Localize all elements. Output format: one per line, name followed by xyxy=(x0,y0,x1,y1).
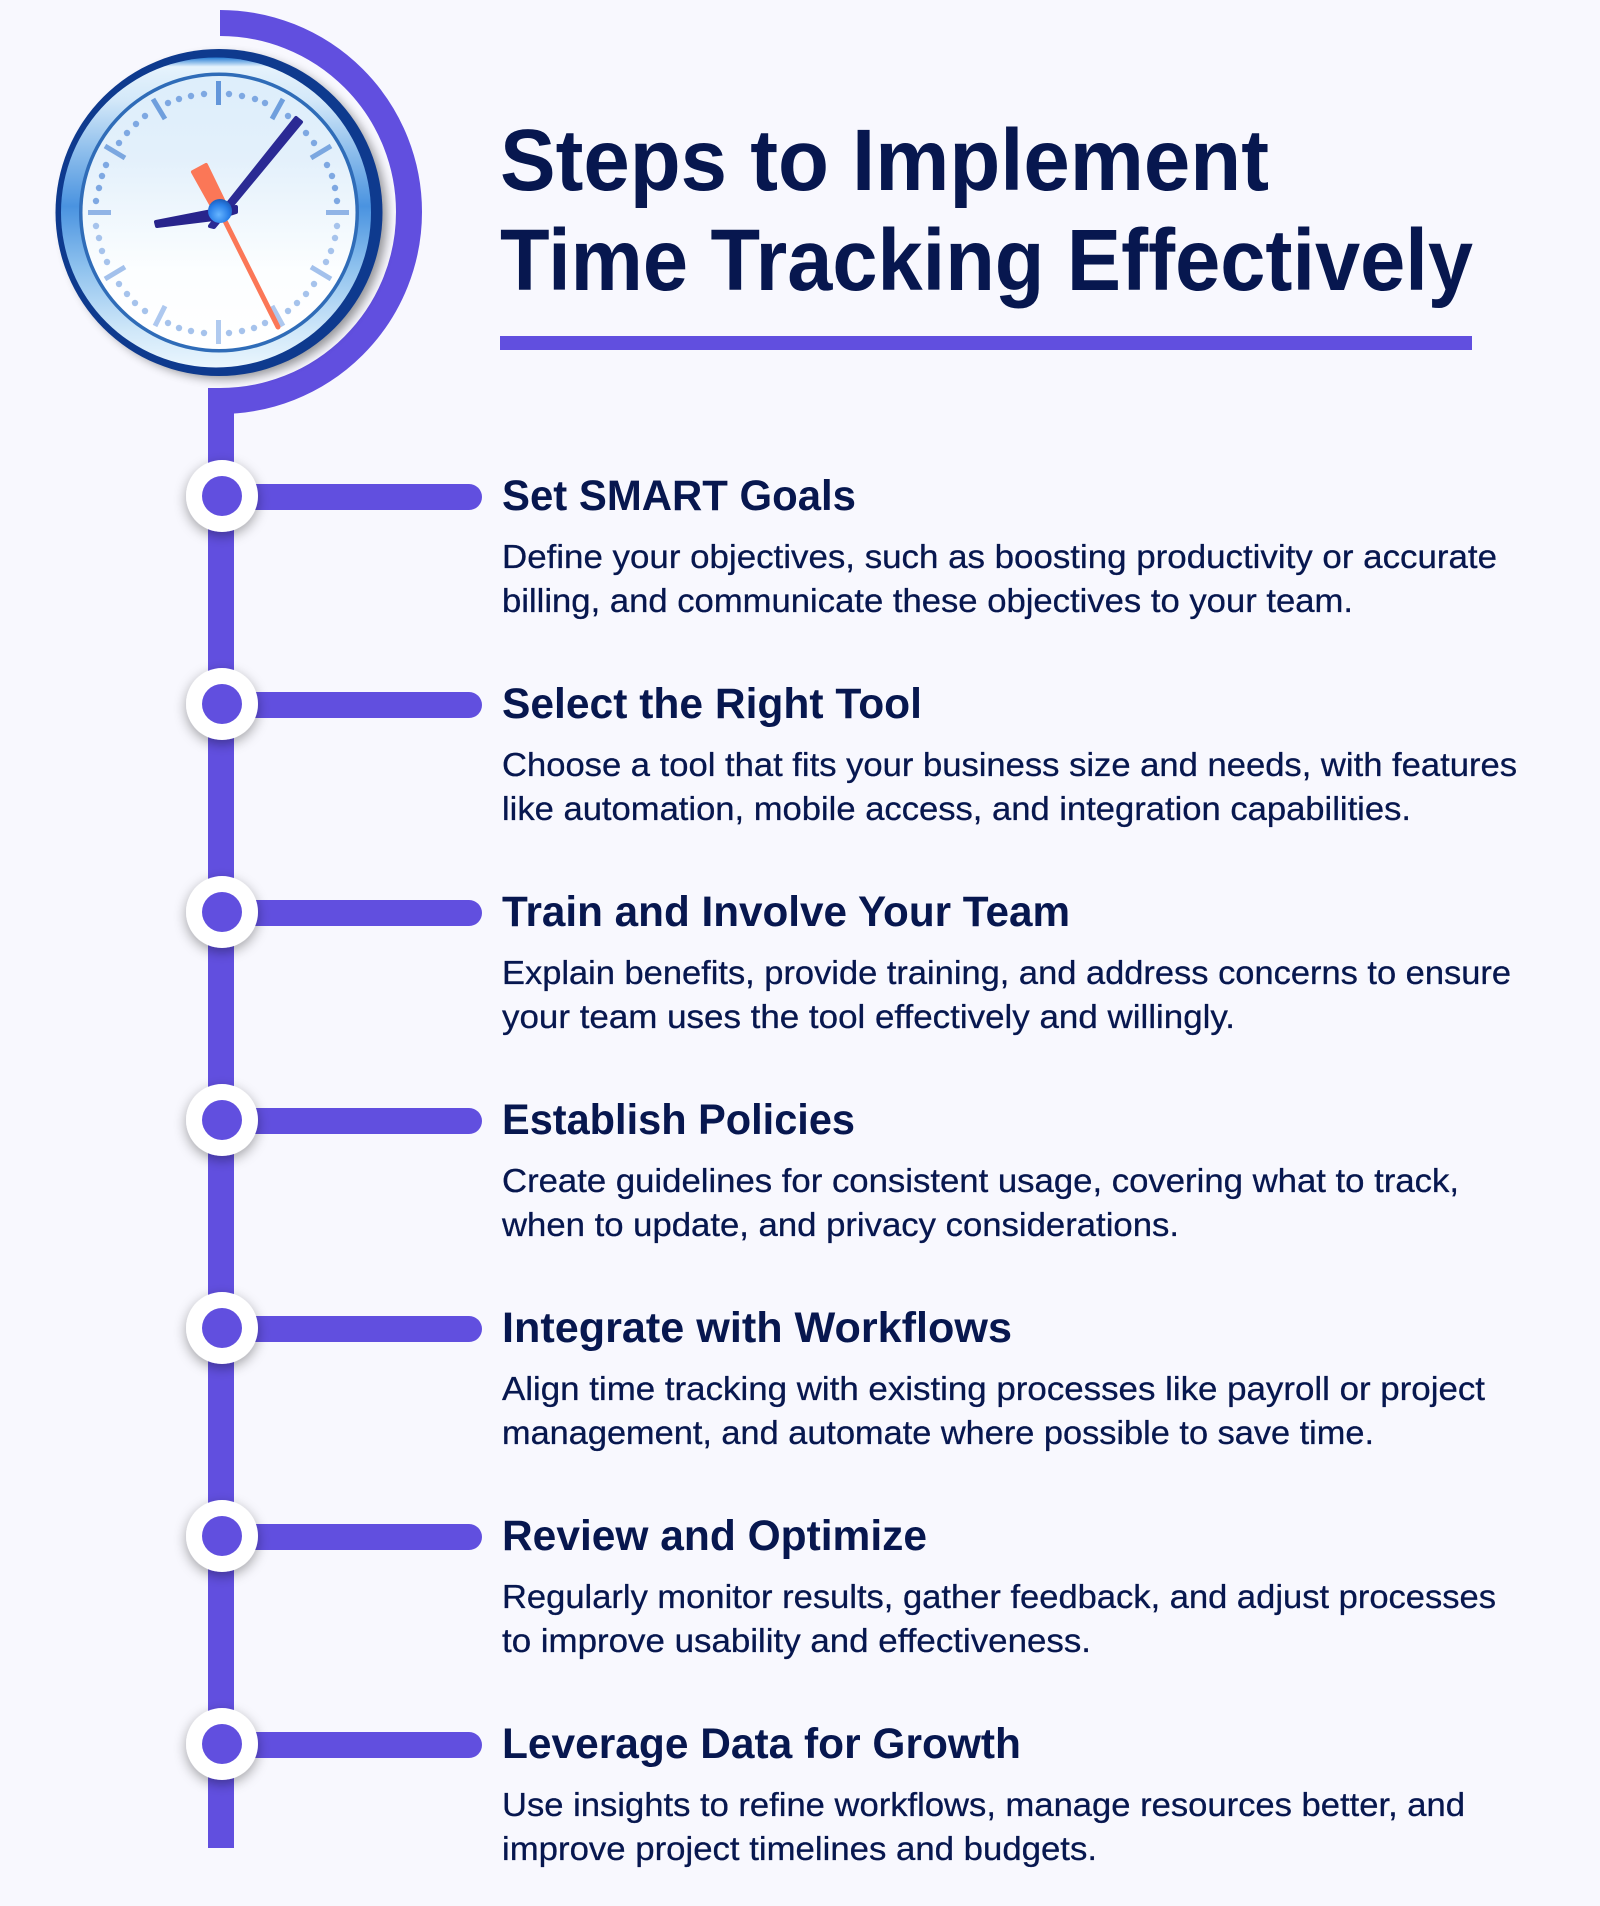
connector bar xyxy=(222,484,482,510)
title: Steps to Implement xyxy=(500,112,1269,209)
timeline node xyxy=(186,1292,258,1364)
step 4: Establish Policies xyxy=(186,1084,1459,1244)
description: Explain benefits, provide training, and address concerns to ensure xyxy=(502,955,1511,992)
description xyxy=(502,539,1497,620)
step 5: Integrate with Workflows xyxy=(186,1292,1486,1452)
description xyxy=(502,1787,1465,1868)
description: Create guidelines for consistent usage, covering what to track, xyxy=(502,1163,1459,1200)
heading: Leverage Data for Growth xyxy=(502,1720,1021,1768)
connector bar xyxy=(222,900,482,926)
title xyxy=(500,112,1473,309)
icon: wall clock xyxy=(56,49,387,379)
timeline node xyxy=(186,1708,258,1780)
description xyxy=(502,1371,1486,1452)
description xyxy=(502,1579,1496,1660)
step 2: Select the Right Tool xyxy=(186,668,1517,828)
heading: Select the Right Tool xyxy=(502,680,922,728)
description: billing, and communicate these objectives to your team. xyxy=(502,583,1353,620)
timeline node xyxy=(186,1500,258,1572)
description: your team uses the tool effectively and willingly. xyxy=(502,999,1235,1036)
heading: Review and Optimize xyxy=(502,1512,927,1560)
connector bar xyxy=(222,1732,482,1758)
timeline node xyxy=(186,668,258,740)
description: to improve usability and effectiveness. xyxy=(502,1623,1091,1660)
heading: Integrate with Workflows xyxy=(502,1304,1012,1352)
connector bar xyxy=(222,1316,482,1342)
connector bar xyxy=(222,1108,482,1134)
vertical timeline line xyxy=(208,388,234,1848)
description: Align time tracking with existing processes like payroll or project xyxy=(502,1371,1486,1408)
title underline xyxy=(500,336,1472,350)
description: Use insights to refine workflows, manage resources better, and xyxy=(502,1787,1465,1824)
step 6: Review and Optimize xyxy=(186,1500,1496,1660)
step 1: Set SMART Goals xyxy=(186,460,1497,620)
description xyxy=(502,955,1511,1036)
title: Time Tracking Effectively xyxy=(500,212,1473,309)
timeline node xyxy=(186,1084,258,1156)
description xyxy=(501,1163,1459,1244)
timeline arc around the clock xyxy=(208,23,409,401)
connector bar xyxy=(222,1524,482,1550)
heading: Set SMART Goals xyxy=(502,472,856,520)
description: improve project timelines and budgets. xyxy=(502,1831,1097,1868)
step 3: Train and Involve Your Team xyxy=(186,876,1511,1036)
description xyxy=(502,747,1517,828)
description: Define your objectives, such as boosting productivity or accurate xyxy=(502,539,1497,576)
timeline node xyxy=(186,460,258,532)
description: when to update, and privacy considerations. xyxy=(501,1207,1179,1244)
connector bar xyxy=(222,692,482,718)
heading: Train and Involve Your Team xyxy=(502,888,1070,936)
timeline node xyxy=(186,876,258,948)
description: management, and automate where possible to save time. xyxy=(502,1415,1374,1452)
step 7: Leverage Data for Growth xyxy=(186,1708,1465,1868)
description: Regularly monitor results, gather feedback, and adjust processes xyxy=(502,1579,1496,1616)
heading: Establish Policies xyxy=(502,1096,855,1144)
description: Choose a tool that fits your business size and needs, with features xyxy=(502,747,1517,784)
description: like automation, mobile access, and integration capabilities. xyxy=(502,791,1411,828)
